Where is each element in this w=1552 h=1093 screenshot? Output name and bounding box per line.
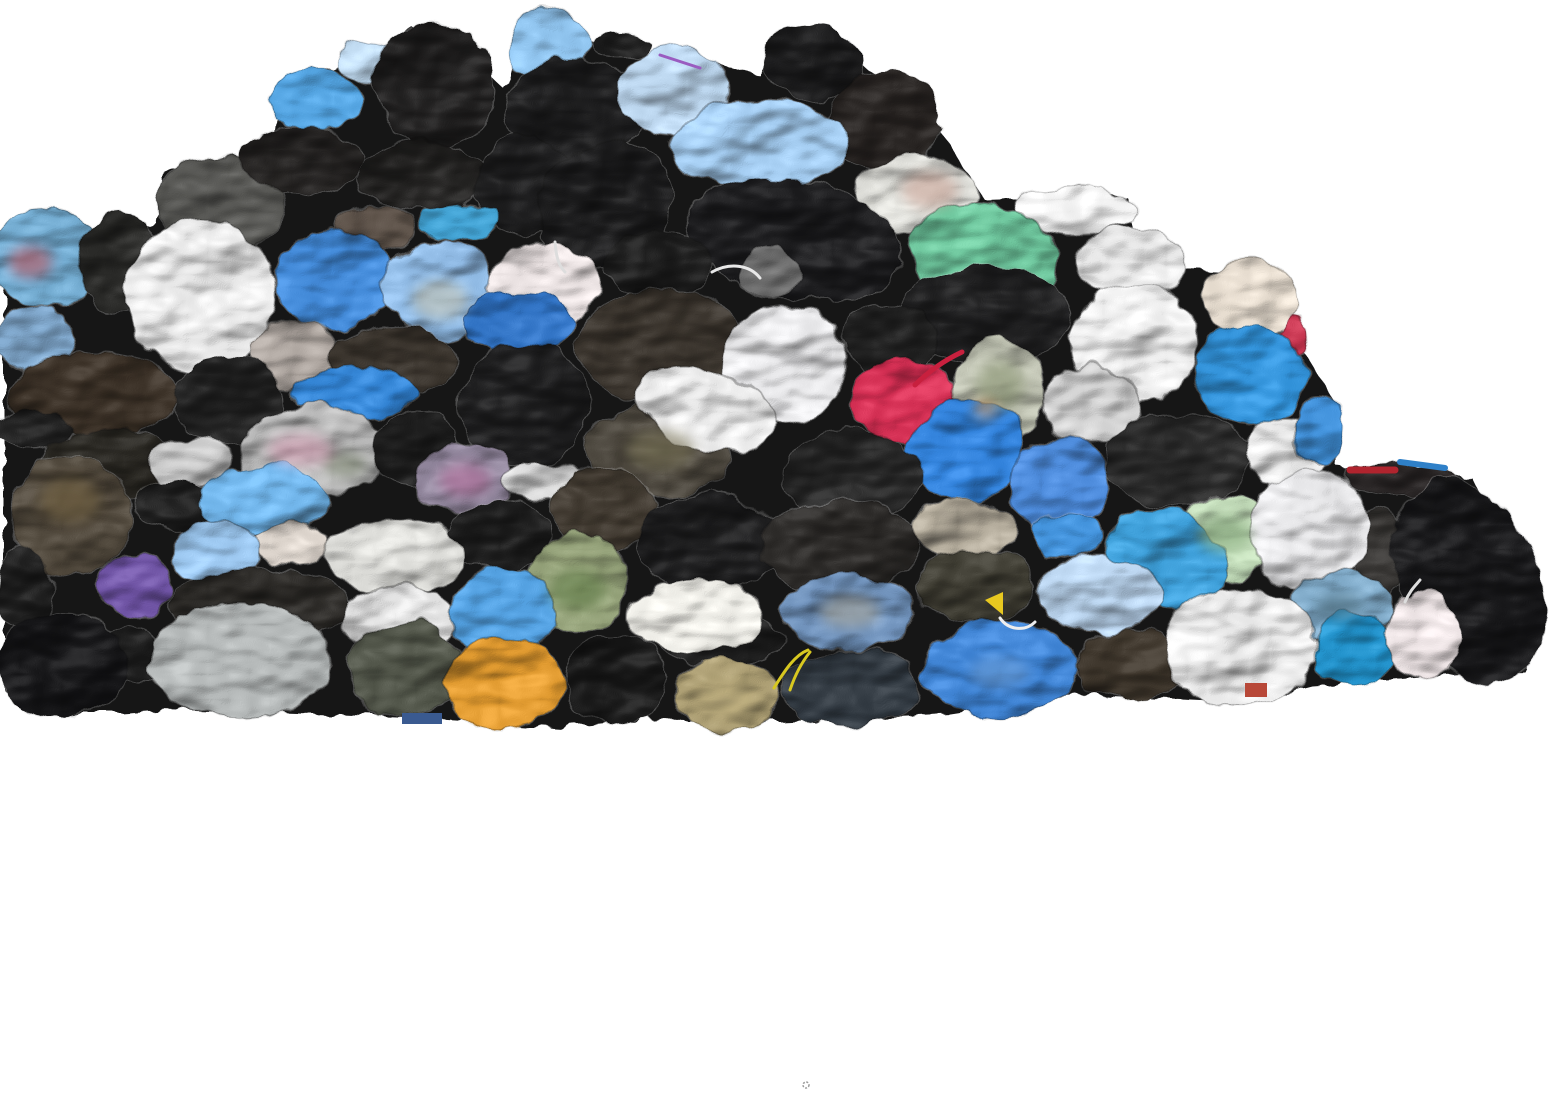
bags: lower pile bbox=[0, 454, 1552, 731]
speck at bottom bbox=[803, 1082, 809, 1088]
bag contents showing through clear plastic bbox=[8, 172, 1362, 716]
bags: middle pile bbox=[0, 267, 1455, 533]
pile silhouette bbox=[4, 25, 1540, 727]
bags: upper pile bbox=[0, 6, 1297, 371]
ties, handles and labels on bags bbox=[402, 55, 1445, 724]
